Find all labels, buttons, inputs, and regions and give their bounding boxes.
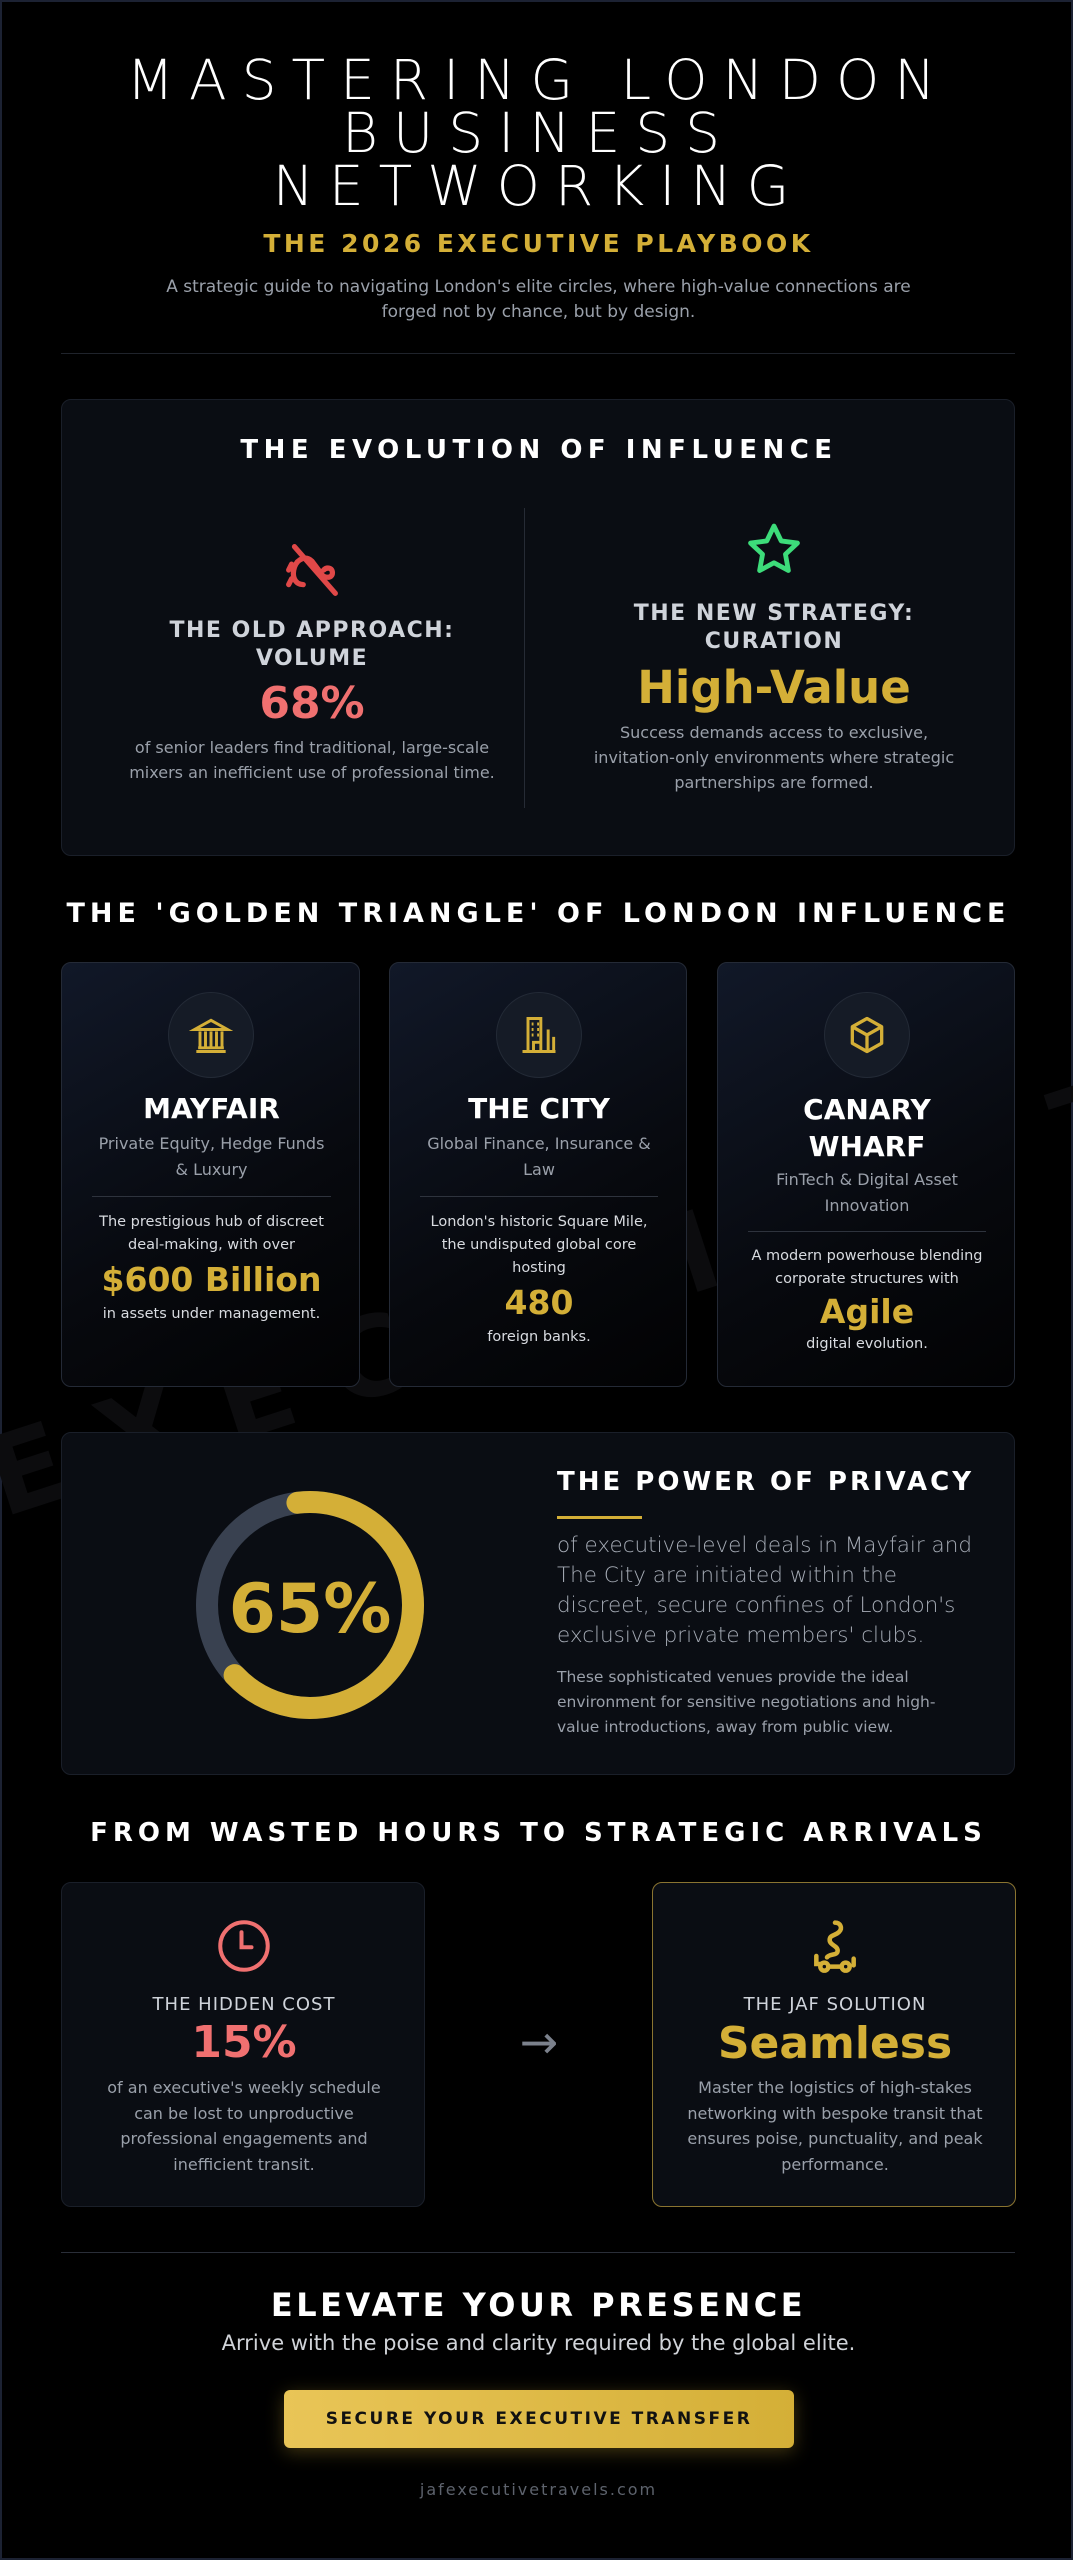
privacy heading: THE POWER OF PRIVACY [557,1467,974,1497]
heading: THE EVOLUTION OF INFLUENCE [240,435,838,465]
icon: star [748,524,800,573]
card text: in assets under management. [103,1306,320,1322]
panel: evolution of influence [61,399,1015,856]
CTA heading: ELEVATE YOUR PRESENCE [271,2286,806,2324]
title: MASTERING LONDON [127,48,950,112]
new title: CURATION [705,629,843,654]
new title: THE NEW STRATEGY: [634,601,914,626]
icon: broken link [286,544,338,596]
CTA subline: Arrive with the poise and clarity required by the global elite. [222,2331,855,2355]
icon: bank [168,992,254,1078]
heading: wasted hours: FROM WASTED HOURS TO STRATEGIC ARRIVALS [90,1818,987,1848]
card text [92,1092,331,1322]
card text: $600 Billion [102,1260,321,1299]
card: canary wharf [717,962,1015,1387]
title: NETWORKING [273,154,804,218]
card: mayfair [61,962,360,1387]
new description: Success demands access to exclusive, invitation-only environments where strategic partnerships are formed. [594,723,954,792]
card: the city [389,962,687,1387]
card text: London's historic Square Mile, the undisputed global core hosting [431,1214,647,1276]
title [127,48,950,218]
icon: route/car [814,1920,856,1973]
donut chart 65% [196,1491,424,1719]
new title [634,601,914,654]
High-Value: High-Value [637,661,911,714]
privacy lead text: of executive-level deals in Mayfair and The City are initiated within the discreet, secure confines of London's exclusive private members' clubs. [557,1533,972,1648]
card text: Private Equity, Hedge Funds & Luxury [99,1134,324,1179]
description: of an executive's weekly schedule can be lost to unproductive professional engagements and inefficient transit. [107,2078,381,2174]
intro text: A strategic guide to navigating London's elite circles, where high-value connections are forged not by chance, but by design. [166,277,911,322]
card text: foreign banks. [487,1329,591,1345]
icon: cube [824,992,910,1078]
icon: building [496,992,582,1078]
label: THE HIDDEN COST [153,1994,335,2015]
heading: golden triangle: THE 'GOLDEN TRIANGLE' OF LONDON INFLUENCE [66,898,1011,929]
old title: THE OLD APPROACH: [170,618,454,643]
arrow: → [520,2015,558,2069]
url: jafexecutivetravels.com [420,2480,657,2499]
card text [420,1092,658,1345]
Seamless: Seamless [718,2018,952,2069]
old title [170,618,454,671]
description: Master the logistics of high-stakes networking with bespoke transit that ensures poise, punctuality, and peak performance. [687,2078,983,2174]
old approach column [129,544,495,782]
card text: 480 [505,1283,573,1322]
icon: clock [218,1920,270,1972]
card: hidden cost [61,1882,425,2207]
title: BUSINESS [342,101,735,165]
card text [748,1093,986,1352]
button: SECURE YOUR EXECUTIVE TRANSFER [326,2409,752,2429]
card: jaf solution [652,1882,1016,2207]
card text: MAYFAIR [143,1092,280,1125]
stat 68%: 68% [259,678,365,729]
card text: digital evolution. [806,1336,928,1352]
card text: FinTech & Digital Asset Innovation [776,1170,958,1215]
stat 15%: 15% [191,2017,297,2068]
privacy small text: These sophisticated venues provide the ideal environment for sensitive negotiations and high-value introductions, away from public view. [557,1668,935,1736]
button [284,2390,794,2448]
card text: A modern powerhouse blending corporate structures with [751,1248,983,1287]
subtitle: THE 2026 EXECUTIVE PLAYBOOK [263,229,814,258]
donut chart 65%: 65% [229,1570,391,1649]
card text: THE CITY [468,1092,610,1125]
new strategy column [594,524,954,792]
card text: Agile [820,1292,914,1331]
card text: The prestigious hub of discreet deal-making, with over [99,1214,324,1253]
old description: of senior leaders find traditional, large-scale mixers an inefficient use of professional time. [129,738,495,782]
card text: WHARF [809,1130,925,1163]
card text: CANARY [803,1093,931,1126]
old title: VOLUME [256,646,368,671]
card text: Global Finance, Insurance & Law [427,1134,651,1179]
panel: power of privacy [61,1432,1015,1775]
label: THE JAF SOLUTION [744,1994,926,2015]
